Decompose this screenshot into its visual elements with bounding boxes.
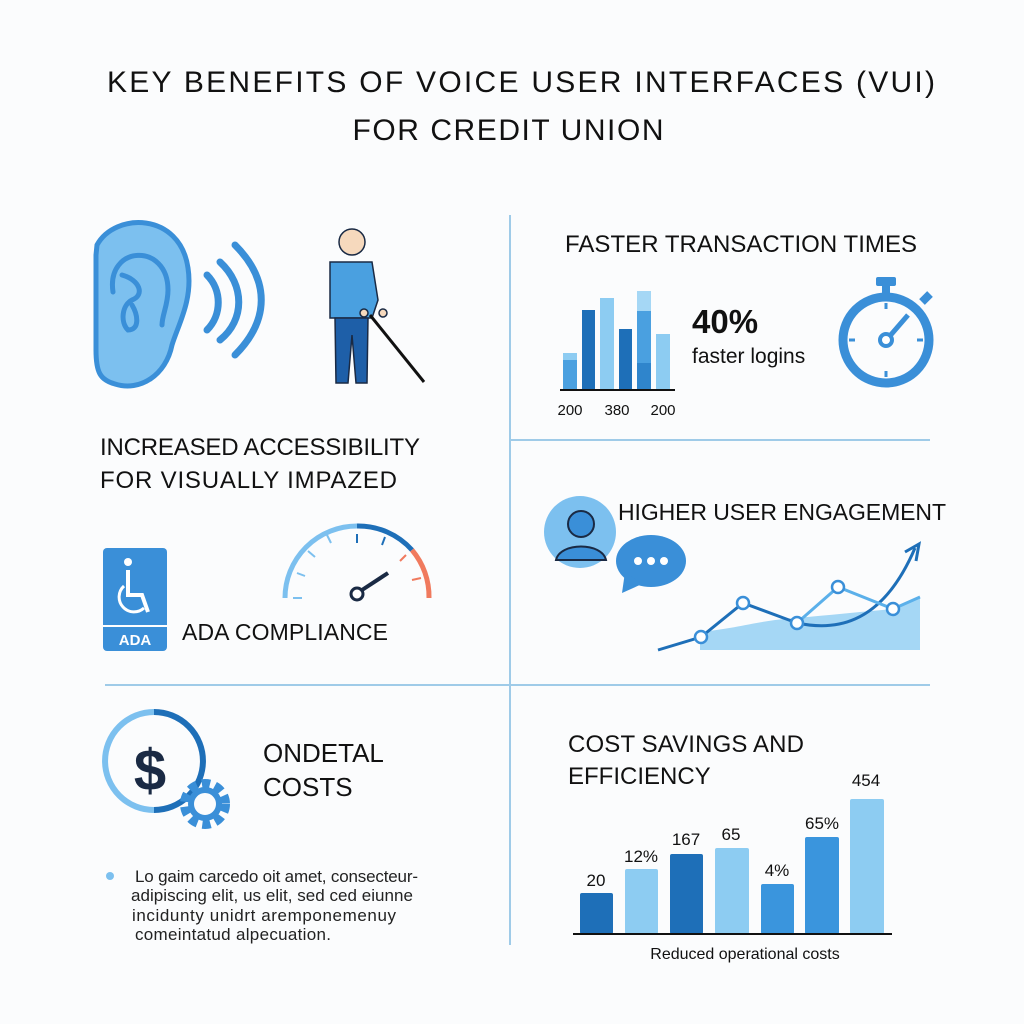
icon: ADA badge	[103, 548, 167, 651]
text block: bullet paragraph: Lo gaim carcedo oit amet, consecteur-	[135, 867, 418, 886]
text block: bullet paragraph: incidunty unidrt aremponemenuy	[132, 906, 396, 925]
heading: increased accessibility: INCREASED ACCESSIBILITY	[100, 434, 420, 461]
line chart: engagement	[658, 544, 920, 650]
icon: chat bubble	[616, 535, 686, 593]
text block: bullet paragraph: comeintatud alpecuation.	[135, 925, 331, 944]
bar chart: cost savings: 12%	[624, 847, 658, 866]
icon: ADA badge: ADA	[119, 632, 151, 649]
title	[107, 66, 935, 147]
icon: user avatar	[544, 496, 616, 568]
text block: bullet paragraph	[106, 867, 418, 944]
icon: person with cane	[330, 229, 424, 383]
bar chart: cost savings: 4%	[765, 861, 789, 880]
title: FOR CREDIT UNION	[352, 114, 664, 147]
icon: sound waves	[207, 245, 261, 355]
icon: ear	[96, 223, 189, 386]
icon: dollar with gear: $	[134, 738, 166, 803]
heading: increased accessibility	[100, 434, 420, 494]
bar chart: cost savings: 65	[722, 825, 740, 844]
bar chart: transaction: 380	[604, 402, 630, 419]
heading: higher user engagement: HIGHER USER ENGAGEMENT	[618, 499, 946, 525]
bar chart: transaction: 200	[557, 402, 583, 419]
bar chart: cost savings	[573, 771, 892, 963]
gauge	[285, 526, 429, 600]
heading: ondetal costs: ONDETAL	[263, 738, 384, 768]
title: KEY BENEFITS OF VOICE USER INTERFACES (VUI)	[107, 66, 935, 99]
heading: ondetal costs	[263, 738, 384, 802]
heading: ondetal costs: COSTS	[263, 772, 353, 802]
bar chart: cost savings: 20	[587, 871, 605, 890]
label: ADA compliance: ADA COMPLIANCE	[182, 619, 388, 645]
heading: increased accessibility: FOR VISUALLY IMPAZED	[100, 467, 397, 494]
icon: dollar with gear	[105, 712, 225, 824]
stat: 40% faster logins: 40%	[692, 303, 758, 340]
heading: cost savings	[568, 731, 804, 790]
stat: 40% faster logins: faster logins	[692, 345, 805, 368]
heading: faster transaction times: FASTER TRANSACTION TIMES	[565, 231, 917, 258]
bar chart: transaction	[557, 291, 676, 419]
bar chart: cost savings: 167	[672, 830, 700, 849]
bar chart: cost savings: 454	[852, 771, 880, 790]
heading: cost savings: EFFICIENCY	[568, 763, 711, 790]
stat: 40% faster logins	[692, 303, 805, 368]
icon: stopwatch	[843, 277, 930, 383]
heading: cost savings: COST SAVINGS AND	[568, 731, 804, 758]
text block: bullet paragraph: adipiscing elit, us elit, sed ced eiunne	[131, 886, 413, 905]
bar chart: transaction: 200	[650, 402, 676, 419]
bar chart: cost savings: 65%	[805, 814, 839, 833]
bar chart: cost savings: Reduced operational costs	[650, 946, 840, 963]
